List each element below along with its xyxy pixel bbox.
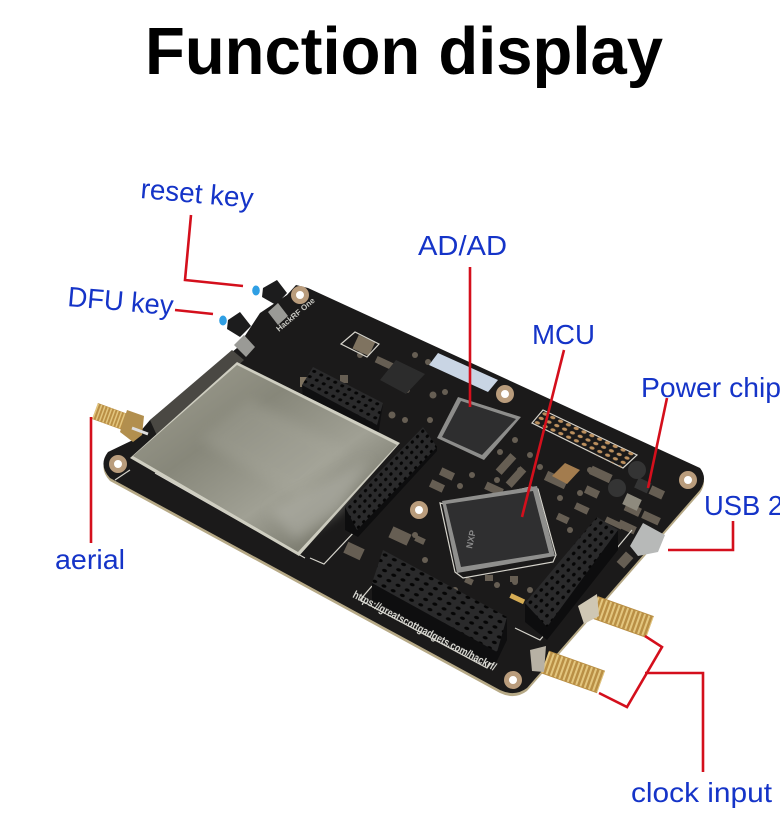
reset button: [252, 280, 288, 325]
DFU button: [219, 312, 255, 357]
callout: Power chip: Power chip: [641, 372, 780, 403]
callout: MCU: MCU: [532, 319, 595, 350]
clock output SMA connector: [578, 594, 650, 627]
title: Function display: [145, 14, 663, 89]
power inductors: [608, 461, 651, 511]
callout: DFU key: DFU key: [66, 281, 175, 321]
top header: [302, 367, 383, 442]
callout: reset key: reset key: [139, 173, 255, 214]
pad pin block: [532, 410, 637, 468]
bottom header: [372, 550, 507, 665]
MCU chip: [442, 486, 555, 573]
callout: clock input: clock input: [631, 777, 772, 808]
left-edge component strip: [150, 350, 244, 438]
clock input SMA connector: [530, 646, 601, 682]
mounting holes: [112, 288, 694, 686]
callout: aerial: aerial: [55, 544, 125, 575]
aerial SMA connector: [95, 410, 148, 442]
silkscreen outlines: [115, 332, 637, 668]
circuit board: [95, 280, 704, 696]
callout: Power chip: [641, 372, 780, 488]
RF shield can: [130, 362, 400, 556]
small gold pad cluster: [552, 463, 580, 484]
board name silkscreen: HackRF One: [275, 296, 317, 334]
URL silkscreen: https://greatscottgadgets.com/hackrf/: [351, 589, 498, 674]
USB connector: [630, 523, 665, 556]
MCU chip: NXP: [464, 529, 478, 549]
callout: clock input: [599, 636, 772, 808]
board edge: [103, 288, 704, 696]
small chip: [380, 360, 425, 394]
right header: [525, 517, 618, 640]
board surface: [103, 285, 704, 693]
memory label sticker: [429, 353, 498, 392]
small gold jumper: [509, 593, 525, 604]
callout: AD/AD: AD/AD: [418, 230, 507, 261]
AD/DA chip: [437, 397, 521, 460]
callout: reset key: [139, 173, 255, 286]
right-of-shield header: [345, 427, 437, 537]
callout: USB 2.0: [668, 490, 780, 550]
silkscreen solder pads: [300, 335, 665, 593]
callout: MCU: [522, 319, 595, 517]
